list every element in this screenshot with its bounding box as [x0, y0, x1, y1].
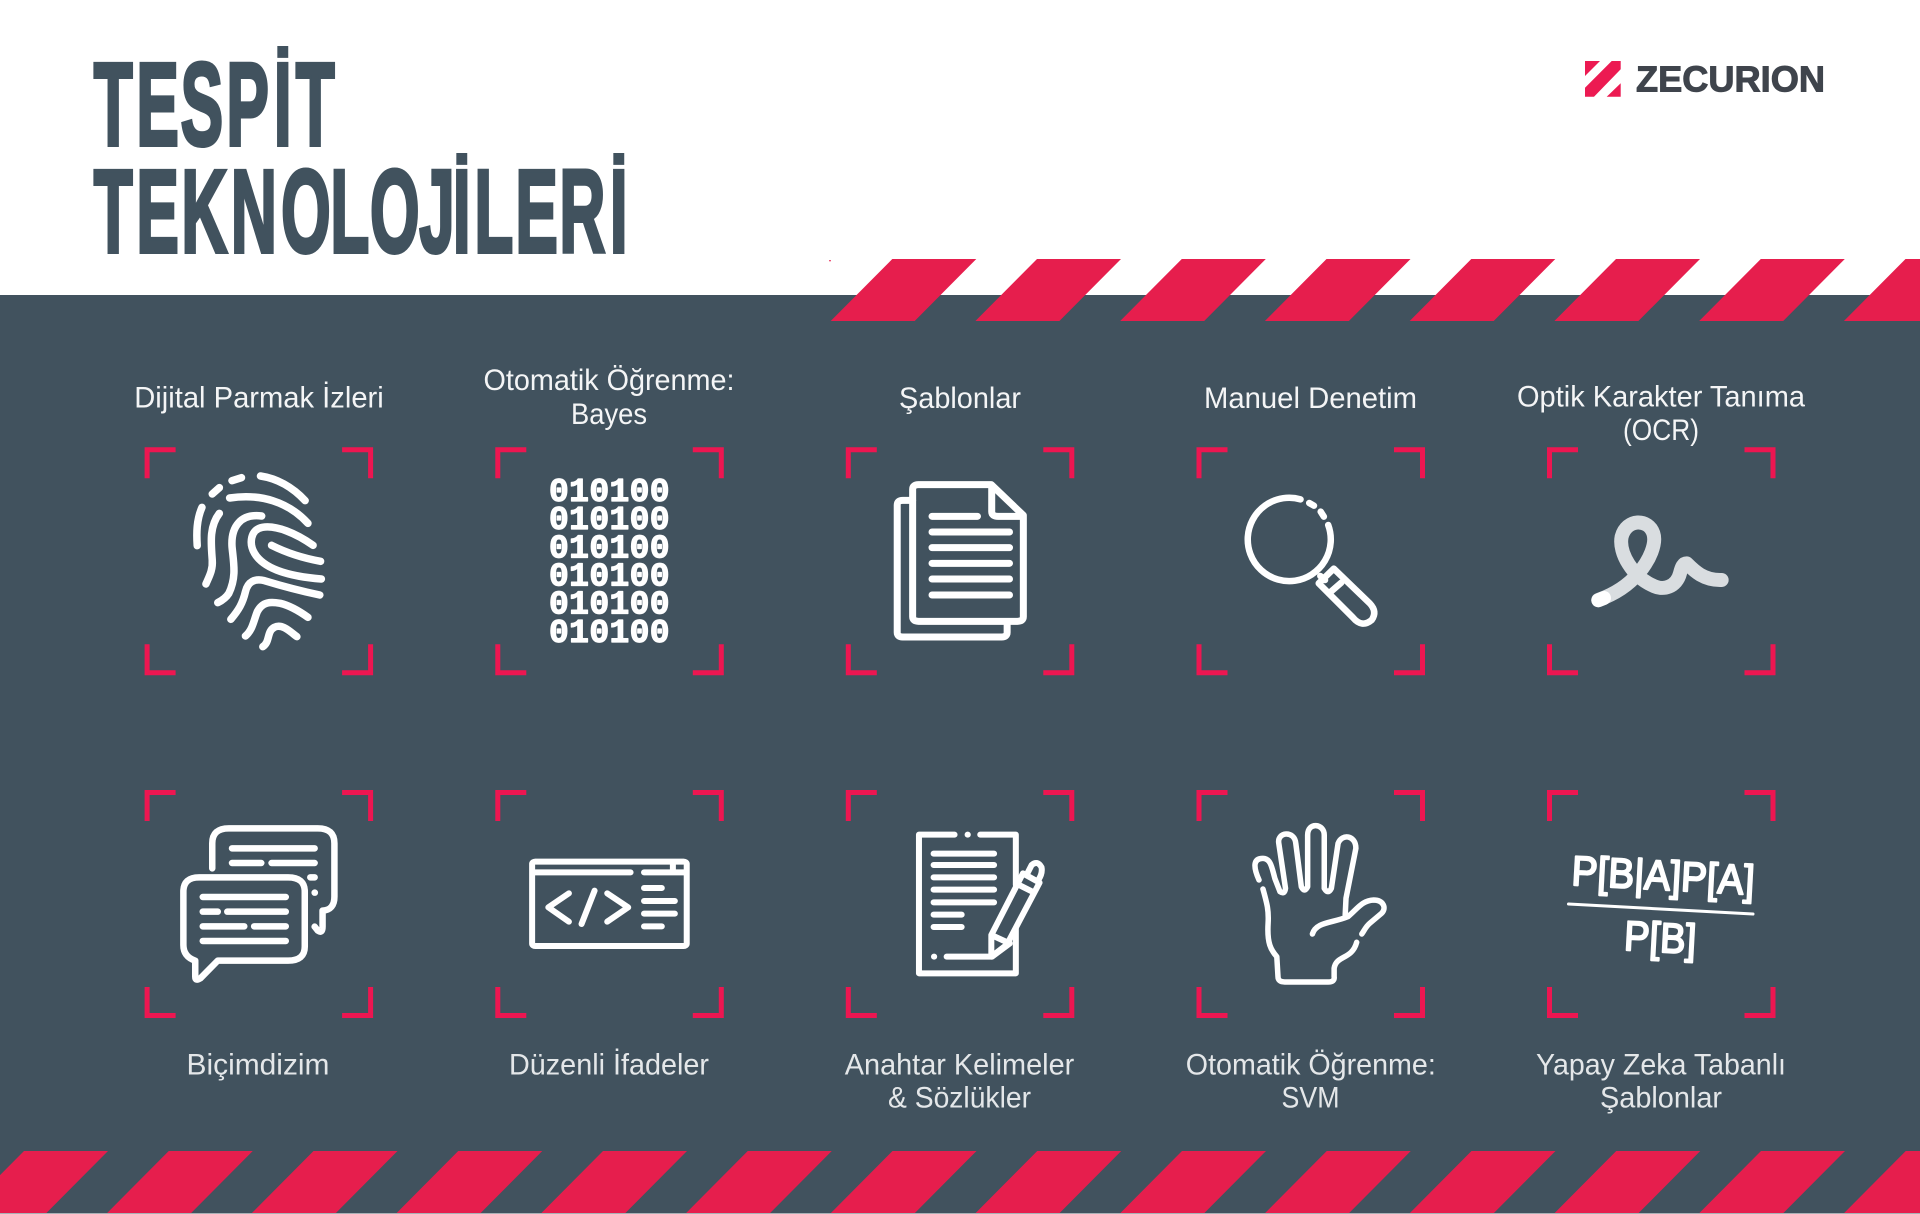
icon: signature: [1598, 522, 1722, 600]
title: [94, 39, 628, 278]
icon: binary digits: 010100: [549, 502, 670, 539]
bracket frame: [498, 450, 721, 673]
label: Biçimdizim: [186, 1048, 330, 1081]
bracket frame: [1199, 450, 1422, 673]
bracket frame: [848, 450, 1072, 673]
bottom hazard stripes: [0, 1151, 1920, 1213]
logo: Zecurion: ZECURION: [1636, 58, 1825, 99]
panel: Anahtar Kelimeler ve Sözlükler: [845, 792, 1074, 1115]
icon: binary digits: 010100: [549, 587, 670, 624]
icon: Bayes formula: P[B]: [1623, 912, 1697, 963]
bracket frame: [1550, 450, 1773, 673]
top hazard stripes: [829, 259, 1920, 321]
panel: Yapay Zeka Tabanlı Şablonlar: Şablonlar: [1600, 1082, 1722, 1115]
icon: document with pencil: [919, 835, 1042, 973]
bracket frame: [848, 792, 1072, 1016]
icon: code window: [532, 862, 687, 946]
panel: Düzenli İfadeler: [498, 792, 721, 1081]
label: Optik Karakter Tanıma: [1517, 380, 1805, 414]
title: TEKNOLOJİLERİ: [94, 146, 628, 278]
panel: Şablonlar: [848, 382, 1072, 673]
icon: binary digits: 010100: [549, 530, 670, 567]
label: Düzenli İfadeler: [509, 1048, 709, 1081]
icon: chat bubbles: [183, 828, 334, 980]
panel: Optik Karakter Tanıma: (OCR): [1623, 414, 1699, 447]
panel: Otomatik Öğrenme SVM: SVM: [1282, 1082, 1340, 1115]
icon: Bayes formula: P[B|A]P[A]: [1571, 847, 1756, 904]
panel: Optik Karakter Tanıma: [1517, 380, 1805, 673]
panel: Otomatik Öğrenme Bayes: [484, 364, 734, 673]
label: Manuel Denetim: [1204, 382, 1417, 415]
label: Yapay Zeka Tabanlı: [1536, 1048, 1786, 1081]
label: Dijital Parmak İzleri: [134, 382, 384, 415]
panel: Biçimdizim: [147, 792, 371, 1081]
panel: Otomatik Öğrenme SVM: [1186, 792, 1436, 1115]
panel: Anahtar Kelimeler ve Sözlükler: & Sözlükler: [888, 1082, 1031, 1115]
icon: hand: [1255, 826, 1384, 982]
label: Anahtar Kelimeler: [845, 1048, 1074, 1081]
icon: binary digits: 010100: [549, 474, 670, 511]
icon: binary digits: 010100: [549, 615, 670, 652]
panel: Otomatik Öğrenme Bayes: Bayes: [571, 398, 647, 431]
icon: Bayes formula: [1568, 847, 1756, 963]
title: TESPİT: [94, 39, 335, 171]
bracket frame: [498, 792, 721, 1016]
bracket frame: [147, 450, 371, 673]
label: Şablonlar: [899, 382, 1021, 415]
panel: Dijital Parmak İzleri: [134, 382, 384, 673]
icon: documents: [897, 485, 1023, 637]
bracket frame: [147, 792, 371, 1016]
bracket frame: [1550, 792, 1773, 1016]
icon: fingerprint: [197, 476, 321, 647]
panel: Yapay Zeka Tabanlı Şablonlar: [1536, 792, 1786, 1115]
panel: Manuel Denetim: [1199, 382, 1422, 673]
icon: binary digits: [549, 474, 670, 652]
label: Otomatik Öğrenme:: [484, 364, 734, 397]
label: Otomatik Öğrenme:: [1186, 1048, 1436, 1081]
icon: magnifier: [1248, 498, 1374, 624]
bracket frame: [1199, 792, 1422, 1016]
icon: binary digits: 010100: [549, 558, 670, 596]
